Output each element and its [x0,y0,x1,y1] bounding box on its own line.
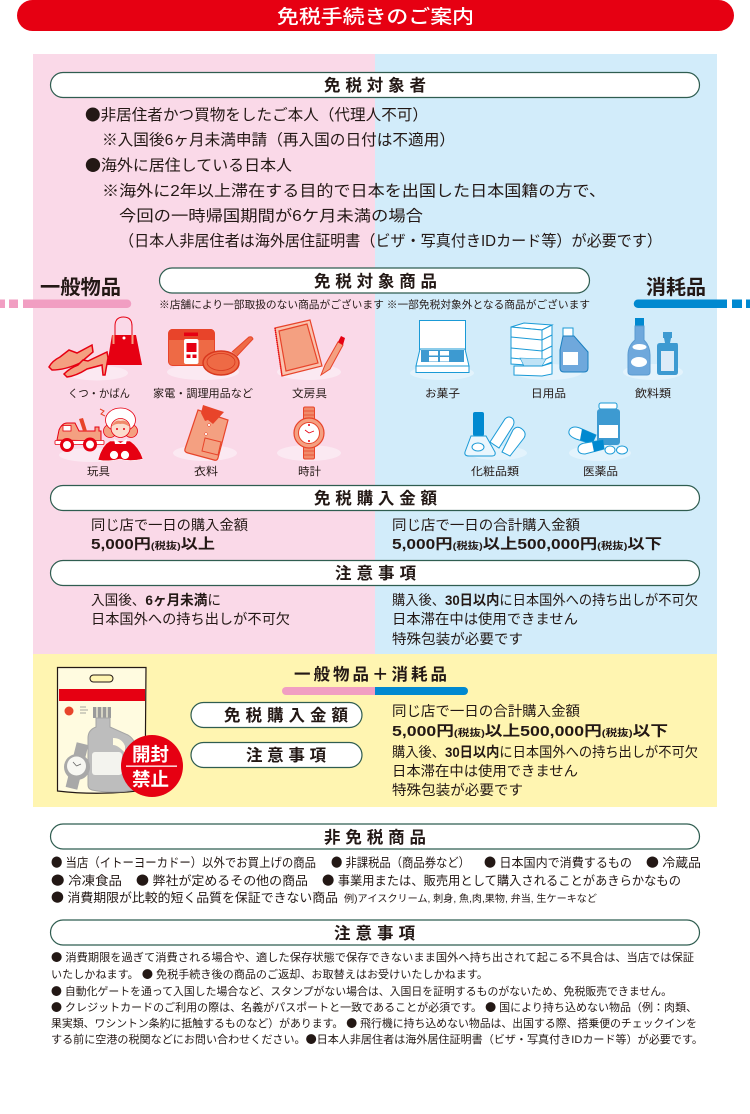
text block: combined amount: 5,000円 (税抜) 以上500,000円 (税抜) 以下 [392,723,668,740]
text block: non-exempt goods list: ● 日本国内で消費するもの [484,852,632,871]
text block: cautions: ● 自動化ゲートを通って入国した場合など、スタンプがない場合は、入国日を証明するものがないため、免税販売できません。 [51,983,672,999]
icon captions: 玩具 [87,465,110,478]
text block: non-exempt goods list: ● 冷凍食品 [51,870,122,889]
text block: combined amount: 同じ店で一日の合計購入金額 [392,703,580,719]
text block: general goods notes [91,592,290,627]
text block: consumables amount [392,517,662,553]
text block: consumables notes: 日本滞在中は使用できません [392,611,578,627]
text block: combined amount [392,703,668,740]
text block: combined notes: 特殊包装が必要です [392,782,523,798]
heading: eligible goods: 免税対象商品 [314,271,437,291]
note: store exclusions: ※店舗により一部取扱のない商品がございます ※一部免税対象外となる商品がございます [159,298,590,311]
text block: consumables notes: 特殊包装が必要です [392,631,523,647]
text block: consumables amount: 5,000円 (税抜) 以上500,000円 (税抜) 以下 [392,536,662,553]
icon: medicine [569,403,631,461]
heading: eligible persons [50,72,700,98]
text block: eligibility conditions: ※海外に2年以上滞在する目的で日本を出国した日本国籍の方で、 [102,182,606,200]
icon captions: 飲料類 [635,386,671,400]
heading: cautions: 注意事項 [334,924,416,943]
icon captions: 衣料 [194,464,218,478]
badge: do not open [121,735,183,797]
text block: eligibility conditions [85,103,662,250]
heading: general goods plus consumables [282,665,468,695]
badge: do not open: 禁止 [132,769,169,790]
text block: eligibility conditions: 今回の一時帰国期間が6ケ月未満の場合 [119,207,424,225]
text block: cautions: 果実類、ワシントン条約に抵触するものなど）があります。 ● 飛行機に持ち込めない物品は、出国する際、搭乗便のチェックインを [51,1015,697,1031]
icon: wristwatch [277,407,341,461]
panel: eligible persons [50,72,700,250]
text block: non-exempt goods list: ● 消費期限が比較的短く品質を保証できない商品 [51,887,338,906]
label: consumables: 消耗品 [646,276,706,299]
text block: eligibility conditions: ●海外に居住している日本人 [85,154,293,176]
icon captions: お菓子 [425,387,460,400]
text block: general goods amount: 5,000円 (税抜) 以上 [91,536,215,553]
icon captions [68,386,671,478]
text block: general goods notes: 入国後、6ヶ月未満に [91,592,221,608]
icon captions: くつ・かばん [68,387,130,400]
text block: general goods amount: 同じ店で一日の購入金額 [91,517,248,533]
label: general goods [0,276,131,308]
icon: toy car and doll [55,408,143,462]
heading: general goods plus consumables: 一般物品＋消耗品 [294,665,447,684]
icon: shirt [173,405,237,461]
text block: cautions: ● クレジットカードのご利用の際は、名義がパスポートと一致であることが必須です。 ● 国により持ち込めない物品（例：肉類、 [51,999,697,1015]
icon captions: 文房具 [292,386,327,400]
heading: purchase amount [50,486,700,510]
text block: non-exempt goods list: 例)アイスクリーム, 刺身, 魚,肉,果物, 弁当, 生ケーキなど [344,892,597,905]
icon: notebook and pen [275,320,345,380]
text block: non-exempt goods list: ● 当店（イトーヨーカドー）以外でお買上げの商品 [51,852,316,871]
icon group: consumables [410,318,683,461]
icon captions: 家電・調理用品など [153,386,253,400]
icon: tissues and detergent [511,323,588,380]
icon captions: 化粧品類 [471,465,519,478]
heading: cautions [50,920,700,945]
text block: eligibility conditions: ●非居住者かつ買物をしたご本人（代理人不可） [85,103,428,125]
background: general goods side [33,54,375,654]
text block: cautions: する前に空港の税関などにお問い合わせください。●日本人非居住者は海外居住証明書（ビザ・写真付きIDカード等）が必要です。 [51,1031,703,1047]
text block: non-exempt goods list: ● 事業用または、販売用として購入されることがあきらかなもの [322,870,681,889]
icon group: general goods [49,317,345,462]
heading: notes [50,560,700,586]
text block: non-exempt goods list: ● 非課税品（商品券など） [331,852,470,871]
badge: do not open: 開封 [132,744,169,765]
text block: consumables notes [392,592,698,647]
text block: cautions: ● 消費期限を過ぎて消費される場合や、適した保存状態で保存できないまま国外へ持ち出されて起こる不具合は、当店では保証 [51,949,694,965]
icon: sealed bag [58,668,146,793]
text block: combined notes: 購入後、30日以内に日本国外への持ち出しが不可欠 [392,744,698,760]
pill: notes: 注意事項 [246,746,326,765]
heading: non-exempt goods: 非免税商品 [324,827,426,847]
panel: combined goods [33,654,717,807]
text block: general goods notes: 日本国外への持ち出しが不可欠 [91,611,290,627]
icon: confectionery box [410,320,474,380]
text block: general goods amount [91,517,248,553]
text block: non-exempt goods list: ● 冷蔵品 [646,852,701,871]
text block: non-exempt goods list: ● 弊社が定めるその他の商品 [136,870,308,889]
label: consumables [634,276,750,308]
icon captions: 時計 [298,464,321,478]
pill: purchase amount: 免税購入金額 [224,705,348,725]
heading: purchase amount: 免税購入金額 [314,488,438,508]
text block: consumables amount: 同じ店で一日の合計購入金額 [392,517,580,533]
text block: eligibility conditions: （日本人非居住者は海外居住証明書（ビザ・写真付きIDカード等）が必要です） [119,232,662,250]
text block: consumables notes: 購入後、30日以内に日本国外への持ち出しが不可欠 [392,592,698,608]
label: general goods: 一般物品 [40,276,121,299]
heading: eligible goods [160,268,590,293]
icon: cosmetics [465,412,527,460]
text block: combined notes [392,744,698,798]
text block: non-exempt goods list [51,852,701,906]
text block: eligibility conditions: ※入国後6ヶ月未満申請（再入国の日付は不適用） [102,131,455,149]
text block: combined notes: 日本滞在中は使用できません [392,763,578,779]
pill: purchase amount [191,702,362,728]
pill: notes [191,742,362,768]
title bar [17,0,734,31]
icon captions: 医薬品 [583,465,618,478]
text block: cautions [51,949,703,1047]
heading: eligible persons: 免税対象者 [324,75,426,95]
icon: bottles [623,318,683,380]
icon captions: 日用品 [531,387,566,400]
title bar: 免税手続きのご案内 [277,6,474,28]
background: consumables side [375,54,717,654]
icon: rice cooker and frying pan [167,329,253,380]
text block: cautions: いたしかねます。 ● 免税手続き後の商品のご返却、お取替えはお受けいたしかねます。 [51,966,488,982]
heading: notes: 注意事項 [335,564,416,583]
heading: non-exempt goods [50,824,700,849]
icon: shoes and bag [49,317,142,380]
